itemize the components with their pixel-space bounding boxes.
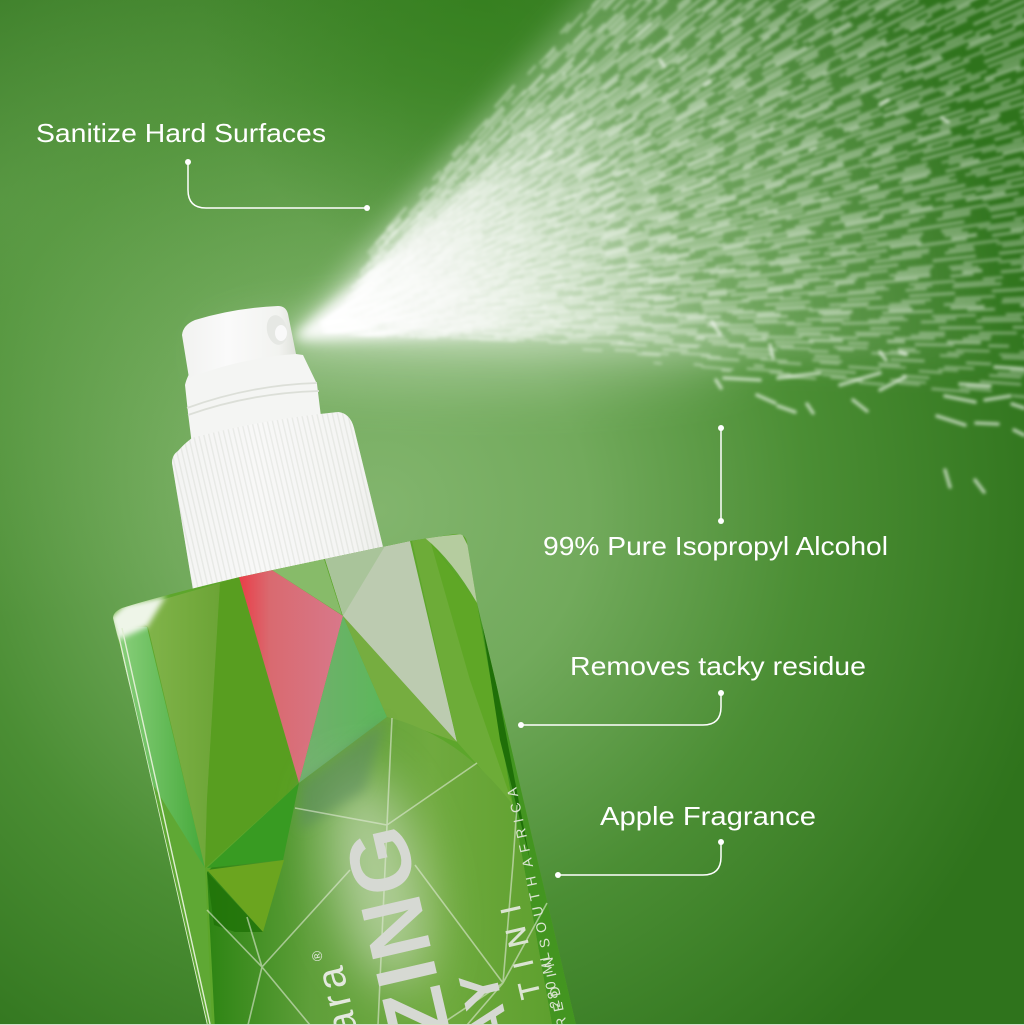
pump nozzle and cap bbox=[172, 306, 385, 590]
leader dots bbox=[555, 839, 724, 878]
right dark strip bbox=[477, 603, 580, 1025]
white rim corner bbox=[110, 596, 166, 640]
outer mist fan bbox=[295, 0, 1024, 372]
actuator head bbox=[182, 306, 296, 378]
callout: Apple Fragrance bbox=[555, 801, 816, 878]
darker edge bbox=[482, 624, 530, 858]
origin line: RED IN SOUTH AFRICA bbox=[502, 780, 570, 1025]
callout label: 99% Pure Isopropyl Alcohol bbox=[543, 531, 888, 561]
main green facet bbox=[205, 577, 299, 868]
chunky far streaks bbox=[511, 0, 1024, 346]
variant name: TINI bbox=[492, 889, 546, 1002]
label glow bbox=[310, 763, 446, 997]
ribbed collar bbox=[172, 412, 385, 590]
neck ridges bbox=[187, 383, 319, 415]
right green facet bbox=[412, 538, 513, 805]
callout label: Apple Fragrance bbox=[600, 801, 816, 831]
ray copy one bbox=[324, 0, 1024, 417]
top centre shade bbox=[0, 0, 1024, 300]
red facet bbox=[239, 570, 343, 783]
left edge highlight bbox=[117, 628, 210, 1024]
translucent white facet bbox=[325, 541, 457, 742]
callout: 99% Pure Isopropyl Alcohol bbox=[543, 425, 888, 561]
stray droplets bbox=[660, 60, 1024, 492]
ray copy two bbox=[321, 0, 1024, 414]
pale green top facet bbox=[272, 559, 342, 615]
dark triangle facet bbox=[207, 783, 299, 868]
callout label: Removes tacky residue bbox=[570, 651, 866, 681]
callout leader bbox=[188, 162, 367, 208]
bottle body bbox=[113, 534, 576, 1024]
olive triangle facet bbox=[207, 860, 284, 932]
label grey shade bbox=[298, 724, 382, 824]
callout label: Sanitize Hard Surfaces bbox=[36, 118, 326, 148]
callout: Sanitize Hard Surfaces bbox=[36, 118, 370, 211]
callout leader bbox=[521, 693, 721, 725]
threaded neck bbox=[185, 345, 322, 445]
nozzle hole bbox=[264, 313, 290, 347]
radial droplet streaks bbox=[319, 0, 1024, 417]
leader dots bbox=[518, 690, 724, 728]
volume line: 280 ML bbox=[535, 949, 563, 1010]
leader dots bbox=[185, 159, 370, 211]
ray copy three bbox=[319, 0, 1024, 400]
dense inner mist bbox=[295, 70, 800, 340]
leader dots bbox=[718, 425, 724, 524]
left highlight facet bbox=[117, 627, 205, 868]
nozzle centre bbox=[275, 325, 287, 341]
right deep facet bbox=[430, 540, 513, 805]
green middle facet bbox=[343, 616, 457, 742]
network lines bbox=[207, 718, 547, 1025]
upper tint of white facet bbox=[325, 546, 385, 616]
base bbox=[113, 534, 576, 1024]
label panel bbox=[207, 717, 553, 1025]
pale corner facet bbox=[425, 534, 477, 603]
olive facet bbox=[146, 583, 220, 868]
callout leader bbox=[558, 842, 721, 875]
registered mark: ® bbox=[308, 949, 326, 963]
callout leader bbox=[720, 428, 722, 521]
facet shadow bbox=[207, 872, 263, 932]
callout: Removes tacky residue bbox=[518, 651, 866, 728]
mist glow below spray bbox=[210, 318, 750, 386]
spray plume bbox=[295, 0, 1024, 492]
fine ray set bbox=[322, 0, 1024, 404]
mint facet bbox=[299, 616, 387, 783]
left lower panel bbox=[154, 786, 212, 1024]
